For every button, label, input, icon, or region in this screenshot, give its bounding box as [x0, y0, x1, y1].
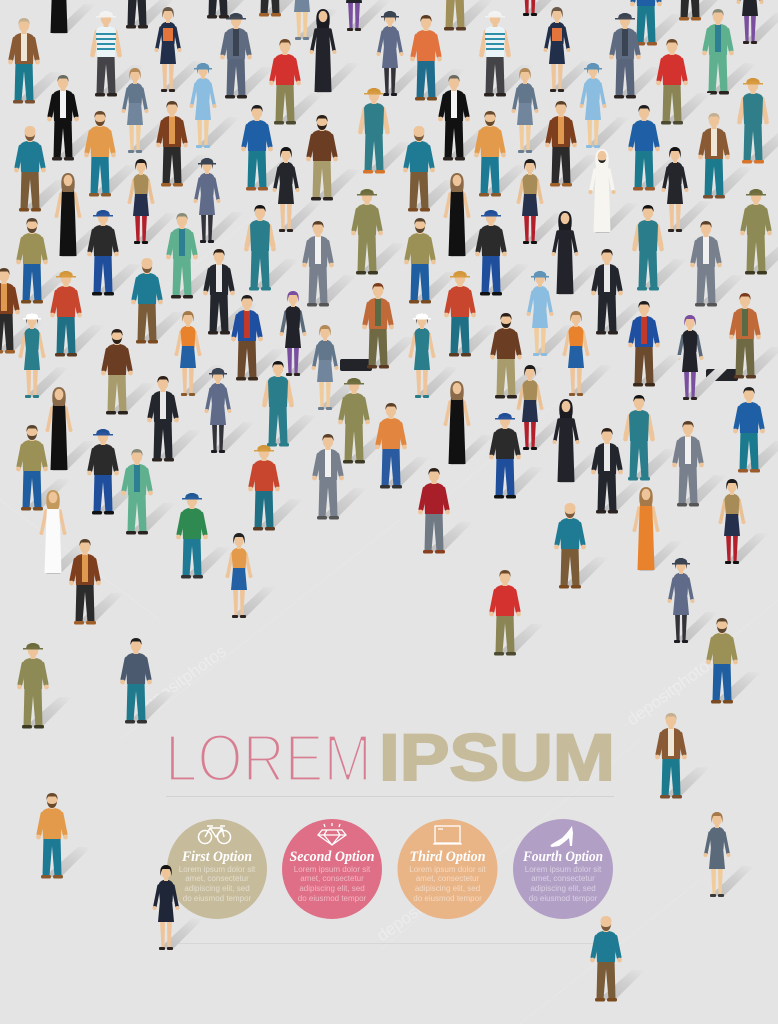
person: man in grey suit	[672, 421, 727, 506]
title word: IPSUM: IPSUM	[379, 720, 615, 794]
person: man in brown sweater	[306, 115, 361, 200]
person: bearded man in olive	[404, 218, 459, 304]
option: First Option: Lorem ipsum dolor sit	[179, 865, 256, 874]
person: woman in teal with tools	[244, 205, 299, 290]
person: man in black sweater	[475, 210, 530, 296]
option: Third Option: amet, consectetur	[416, 874, 480, 883]
person: man in black suit	[203, 249, 258, 334]
person: man in mustard sweater	[474, 111, 529, 196]
person: tuxedo man	[47, 75, 102, 160]
person: police woman	[204, 368, 255, 453]
person: bald man	[554, 503, 609, 588]
person: purple legs, top edge	[736, 0, 778, 44]
person: woman with orange top	[562, 311, 613, 396]
person: man in orange sweater	[375, 403, 430, 488]
person: man in dark suit	[591, 428, 646, 514]
person: man in brown jacket	[69, 539, 124, 624]
person: police woman	[376, 11, 427, 96]
option: Second Option: do eiusmod tempor	[298, 894, 367, 903]
person: man in black sweater	[489, 413, 544, 498]
person: bride in white	[40, 490, 90, 574]
person: woman with purple hair	[676, 315, 727, 400]
person: soldier	[338, 378, 393, 464]
divider	[166, 796, 614, 797]
person: woman in black suit	[152, 865, 203, 950]
person: tuxedo man	[438, 75, 493, 160]
title	[165, 720, 615, 796]
person: worker with overalls	[729, 293, 778, 378]
person: soldier	[351, 189, 406, 274]
watermark: stock photo lines and text: depositphotos	[623, 652, 720, 729]
person: man in grey suit	[690, 221, 745, 306]
person: woman with red tights	[516, 159, 567, 244]
option: First Option: adipiscing elit, sed	[184, 884, 250, 893]
option: Fourth Option: amet, consectetur	[531, 874, 595, 883]
option: Second Option: amet, consectetur	[300, 874, 364, 883]
person: farmer woman	[737, 78, 778, 164]
person: man in brown, left edge	[0, 268, 43, 354]
person: grey woman with folder	[512, 68, 562, 153]
person: woman with book	[544, 7, 594, 92]
person: woman with book	[154, 7, 205, 92]
person: man in orange shirt	[410, 15, 465, 100]
person: bearded man in olive	[706, 618, 761, 704]
option: Fourth Option: Lorem ipsum dolor sit	[525, 865, 602, 874]
person: sailor	[90, 11, 145, 96]
person: woman in teal with whip	[408, 313, 459, 398]
person: bald man	[590, 916, 645, 1002]
person: bald man	[14, 126, 69, 212]
person: man in black sweater	[87, 210, 142, 296]
person: man in dark suit	[147, 376, 202, 462]
option: First Option: do eiusmod tempor	[183, 894, 252, 903]
person: professor	[698, 113, 753, 198]
foreground people	[152, 812, 754, 1002]
person: woman with red tights	[128, 159, 178, 244]
icon: laptop	[433, 826, 462, 844]
person: police officer	[609, 13, 664, 98]
person: woman in teal with tools	[262, 361, 317, 446]
person: medic in green	[121, 449, 176, 534]
person: man in black sweater	[87, 429, 142, 514]
person: man in mustard sweater	[84, 111, 139, 196]
option: Third Option	[398, 819, 498, 919]
person: woman in black dress	[46, 387, 96, 471]
person: man in mustard sweater	[36, 793, 91, 878]
option: Fourth Option: Fourth Option	[522, 849, 603, 865]
person: soldier	[17, 643, 72, 728]
person: woman in black	[662, 147, 712, 232]
person: man in red shirt	[269, 39, 324, 124]
person: woman in beige, top edge	[288, 0, 339, 40]
person: man in red shirt	[489, 570, 544, 656]
person: woman in black dress	[444, 381, 494, 465]
person: woman in black dress	[54, 173, 105, 257]
person: woman in black dress, top edge	[46, 0, 96, 34]
person: woman with red tights	[516, 365, 567, 450]
option: Third Option: adipiscing elit, sed	[415, 884, 480, 893]
person: woman in teal with whip	[18, 313, 69, 398]
option: Third Option: do eiusmod tempor	[413, 894, 482, 903]
person: woman in black	[272, 147, 323, 232]
option: Fourth Option	[513, 819, 613, 919]
icon: bicycle	[198, 826, 230, 844]
person: police woman	[668, 558, 718, 643]
option: Fourth Option: adipiscing elit, sed	[530, 884, 596, 893]
option: First Option: amet, consectetur	[185, 874, 249, 883]
option: Third Option: Lorem ipsum dolor sit	[409, 865, 487, 874]
person: woman in orange dress	[632, 487, 683, 571]
person: bald man	[131, 258, 186, 344]
title word: LOREM: LOREM	[165, 721, 372, 796]
person: man in black suit	[591, 249, 646, 334]
person: woman with purple hair	[280, 291, 330, 376]
person: nun	[552, 399, 603, 483]
icon: diamond	[318, 823, 346, 845]
person: purple legs, top edge	[340, 0, 391, 31]
person: dark suit, top edge	[121, 0, 176, 28]
person: man in brown sweater	[490, 313, 545, 398]
person: man in brown sweater	[101, 329, 156, 414]
person: red legs, top edge	[516, 0, 567, 16]
person: woman with blue skirt	[226, 533, 276, 618]
person: woman in blue dress	[580, 63, 630, 148]
option: Second Option	[282, 819, 382, 919]
person: man in grey sweater	[120, 638, 175, 724]
person: woman in blue dress	[190, 63, 240, 148]
person: woman with red tights	[718, 479, 769, 564]
person: grey woman with folder	[122, 68, 172, 153]
person: nun	[310, 9, 360, 93]
person: worker with overalls	[362, 283, 417, 368]
person: dark suit, top edge	[202, 0, 257, 18]
suitcase on the ground, centre	[340, 359, 372, 371]
person: man in blue and red jacket	[231, 295, 286, 380]
person: medic in green	[166, 213, 221, 298]
person: farmer with straw hat	[444, 271, 499, 356]
person: woman in blue dress	[526, 271, 577, 356]
person: police woman	[194, 158, 244, 243]
person: man in red shirt	[418, 468, 473, 554]
suitcase on the ground, right	[706, 369, 738, 381]
person: professor	[655, 713, 710, 798]
person: farmer woman	[358, 88, 413, 174]
person: woman in teal with tools	[623, 395, 678, 480]
option: First Option	[167, 819, 267, 919]
option: Second Option: Second Option	[290, 849, 374, 865]
person: man in blue and red jacket	[628, 301, 683, 386]
person: sailor	[479, 11, 534, 96]
person: arab man in white robe	[588, 149, 639, 233]
person: bearded man in olive	[16, 218, 71, 304]
option: Fourth Option: do eiusmod tempor	[529, 894, 598, 903]
person: brown trousers, top edge	[674, 0, 729, 20]
option: First Option: First Option	[181, 849, 252, 865]
person: woman in black dress	[444, 173, 494, 257]
person: farmer with straw hat	[248, 445, 303, 530]
person: grey woman with folder	[704, 812, 754, 897]
person: woman in grey	[312, 325, 362, 410]
divider	[166, 943, 614, 944]
person: man in red shirt	[656, 39, 711, 124]
person: man in blue shirt	[241, 105, 296, 190]
option: Second Option: adipiscing elit, sed	[299, 884, 365, 893]
person: woman in teal with tools	[632, 205, 687, 290]
person: bald man	[403, 126, 458, 212]
watermark: stock photo lines and text: depositphotos	[133, 642, 230, 719]
person: man in blue shirt	[733, 387, 778, 472]
person: woman with orange top	[174, 311, 225, 396]
person: man in grey suit	[312, 434, 367, 520]
person: police officer	[220, 13, 275, 98]
person: olive trousers, top edge	[439, 0, 494, 30]
icon: high heel shoe	[550, 826, 573, 847]
person: bearded man in olive	[16, 425, 71, 510]
person: brown trousers, top edge	[254, 0, 309, 16]
person: teal trousers, top edge	[630, 0, 685, 46]
person: nun	[552, 211, 602, 295]
person: man in green with cap	[176, 493, 231, 578]
watermark: stock photo lines and text: depositphotos	[373, 868, 470, 945]
person: professor	[8, 18, 63, 104]
person: man in brown jacket	[156, 101, 211, 186]
person: man in blue shirt	[628, 105, 683, 190]
option: Second Option: Lorem ipsum dolor sit	[294, 865, 371, 874]
person: soldier	[740, 189, 778, 274]
person: man in brown jacket	[545, 101, 600, 186]
option: Third Option: Third Option	[410, 849, 486, 865]
person: medic in green	[702, 9, 757, 94]
person: farmer with straw hat	[50, 271, 105, 356]
person: man in grey suit	[302, 221, 357, 306]
